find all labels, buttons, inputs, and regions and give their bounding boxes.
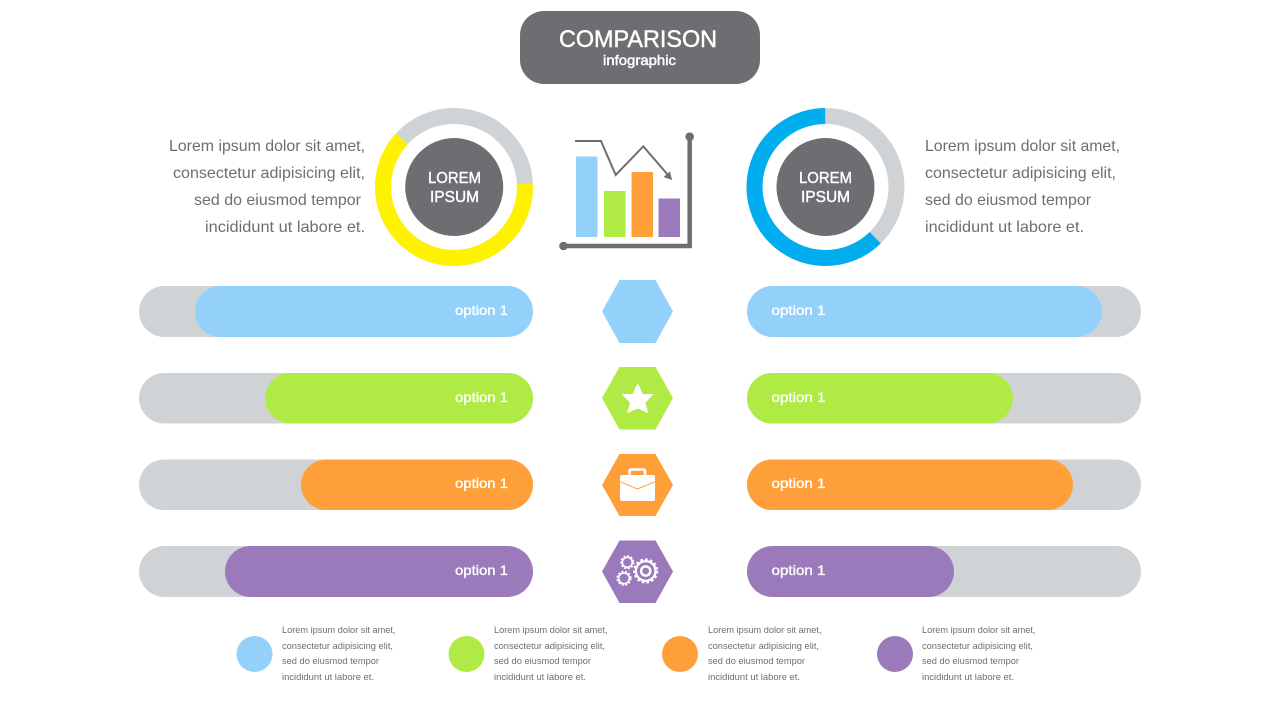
title: infographic [603, 52, 676, 68]
legend item: blue [236, 625, 396, 683]
legend item: green: consectetur adipisicing elit, [494, 641, 605, 652]
icon: green hexagon with star [602, 367, 673, 430]
right text block: Lorem ipsum dolor sit amet, [925, 138, 1120, 155]
right text block: consectetur adipisicing elit, [925, 165, 1116, 182]
legend item: blue: sed do eiusmod tempor [282, 656, 379, 667]
legend item: purple: incididunt ut labore et. [922, 672, 1014, 683]
legend item: orange: Lorem ipsum dolor sit amet, [708, 625, 822, 636]
title: COMPARISON [559, 26, 717, 53]
left bar: blue option 1: option 1 [455, 302, 508, 318]
legend item: purple [877, 625, 1036, 683]
right text block [925, 138, 1120, 236]
title [520, 11, 760, 84]
left bar: orange option 1 [139, 460, 533, 510]
right bar: purple option 1 [747, 546, 1141, 597]
left bar: green option 1 [139, 373, 533, 424]
legend item: blue: incididunt ut labore et. [282, 672, 374, 683]
left text block: sed do eiusmod tempor [194, 192, 362, 209]
icon: bar chart with trend arrow [559, 132, 694, 250]
left donut chart [381, 114, 527, 260]
left bar: blue option 1 [139, 286, 533, 337]
right donut chart [725, 87, 926, 287]
left bar: orange option 1: option 1 [455, 475, 508, 491]
left text block: consectetur adipisicing elit, [173, 165, 365, 182]
legend item: green [448, 625, 608, 683]
left donut chart: LOREM [428, 170, 481, 187]
left bar: purple option 1: option 1 [455, 562, 508, 578]
right bar: blue option 1: option 1 [772, 302, 826, 318]
icon: purple hexagon with gears [602, 540, 673, 603]
legend item: purple: consectetur adipisicing elit, [922, 641, 1033, 652]
left donut chart: IPSUM [430, 189, 479, 206]
right text block: sed do eiusmod tempor [925, 192, 1092, 209]
left text block [169, 138, 365, 236]
right donut chart: IPSUM [801, 189, 850, 206]
legend item: purple: sed do eiusmod tempor [922, 656, 1019, 667]
legend item: green: Lorem ipsum dolor sit amet, [494, 625, 608, 636]
left bar: purple option 1 [139, 546, 533, 597]
right bar: green option 1 [747, 373, 1141, 424]
right bar: blue option 1 [747, 286, 1141, 337]
legend item: orange [662, 625, 822, 683]
right bar: orange option 1 [747, 460, 1141, 510]
left bar: green option 1: option 1 [455, 389, 508, 405]
left text block: incididunt ut labore et. [205, 219, 365, 236]
right text block: incididunt ut labore et. [925, 219, 1084, 236]
right donut chart: LOREM [799, 170, 852, 187]
right bar: green option 1: option 1 [772, 389, 826, 405]
legend item: orange: incididunt ut labore et. [708, 672, 800, 683]
icon: blue hexagon [602, 280, 673, 343]
legend item: purple: Lorem ipsum dolor sit amet, [922, 625, 1036, 636]
legend item: green: sed do eiusmod tempor [494, 656, 591, 667]
right bar: purple option 1: option 1 [772, 562, 826, 578]
legend item: orange: sed do eiusmod tempor [708, 656, 805, 667]
legend item: blue: Lorem ipsum dolor sit amet, [282, 625, 396, 636]
icon: orange hexagon with briefcase [602, 454, 673, 516]
legend item: blue: consectetur adipisicing elit, [282, 641, 393, 652]
legend item: orange: consectetur adipisicing elit, [708, 641, 819, 652]
left text block: Lorem ipsum dolor sit amet, [169, 138, 365, 155]
right bar: orange option 1: option 1 [772, 475, 826, 491]
legend item: green: incididunt ut labore et. [494, 672, 586, 683]
